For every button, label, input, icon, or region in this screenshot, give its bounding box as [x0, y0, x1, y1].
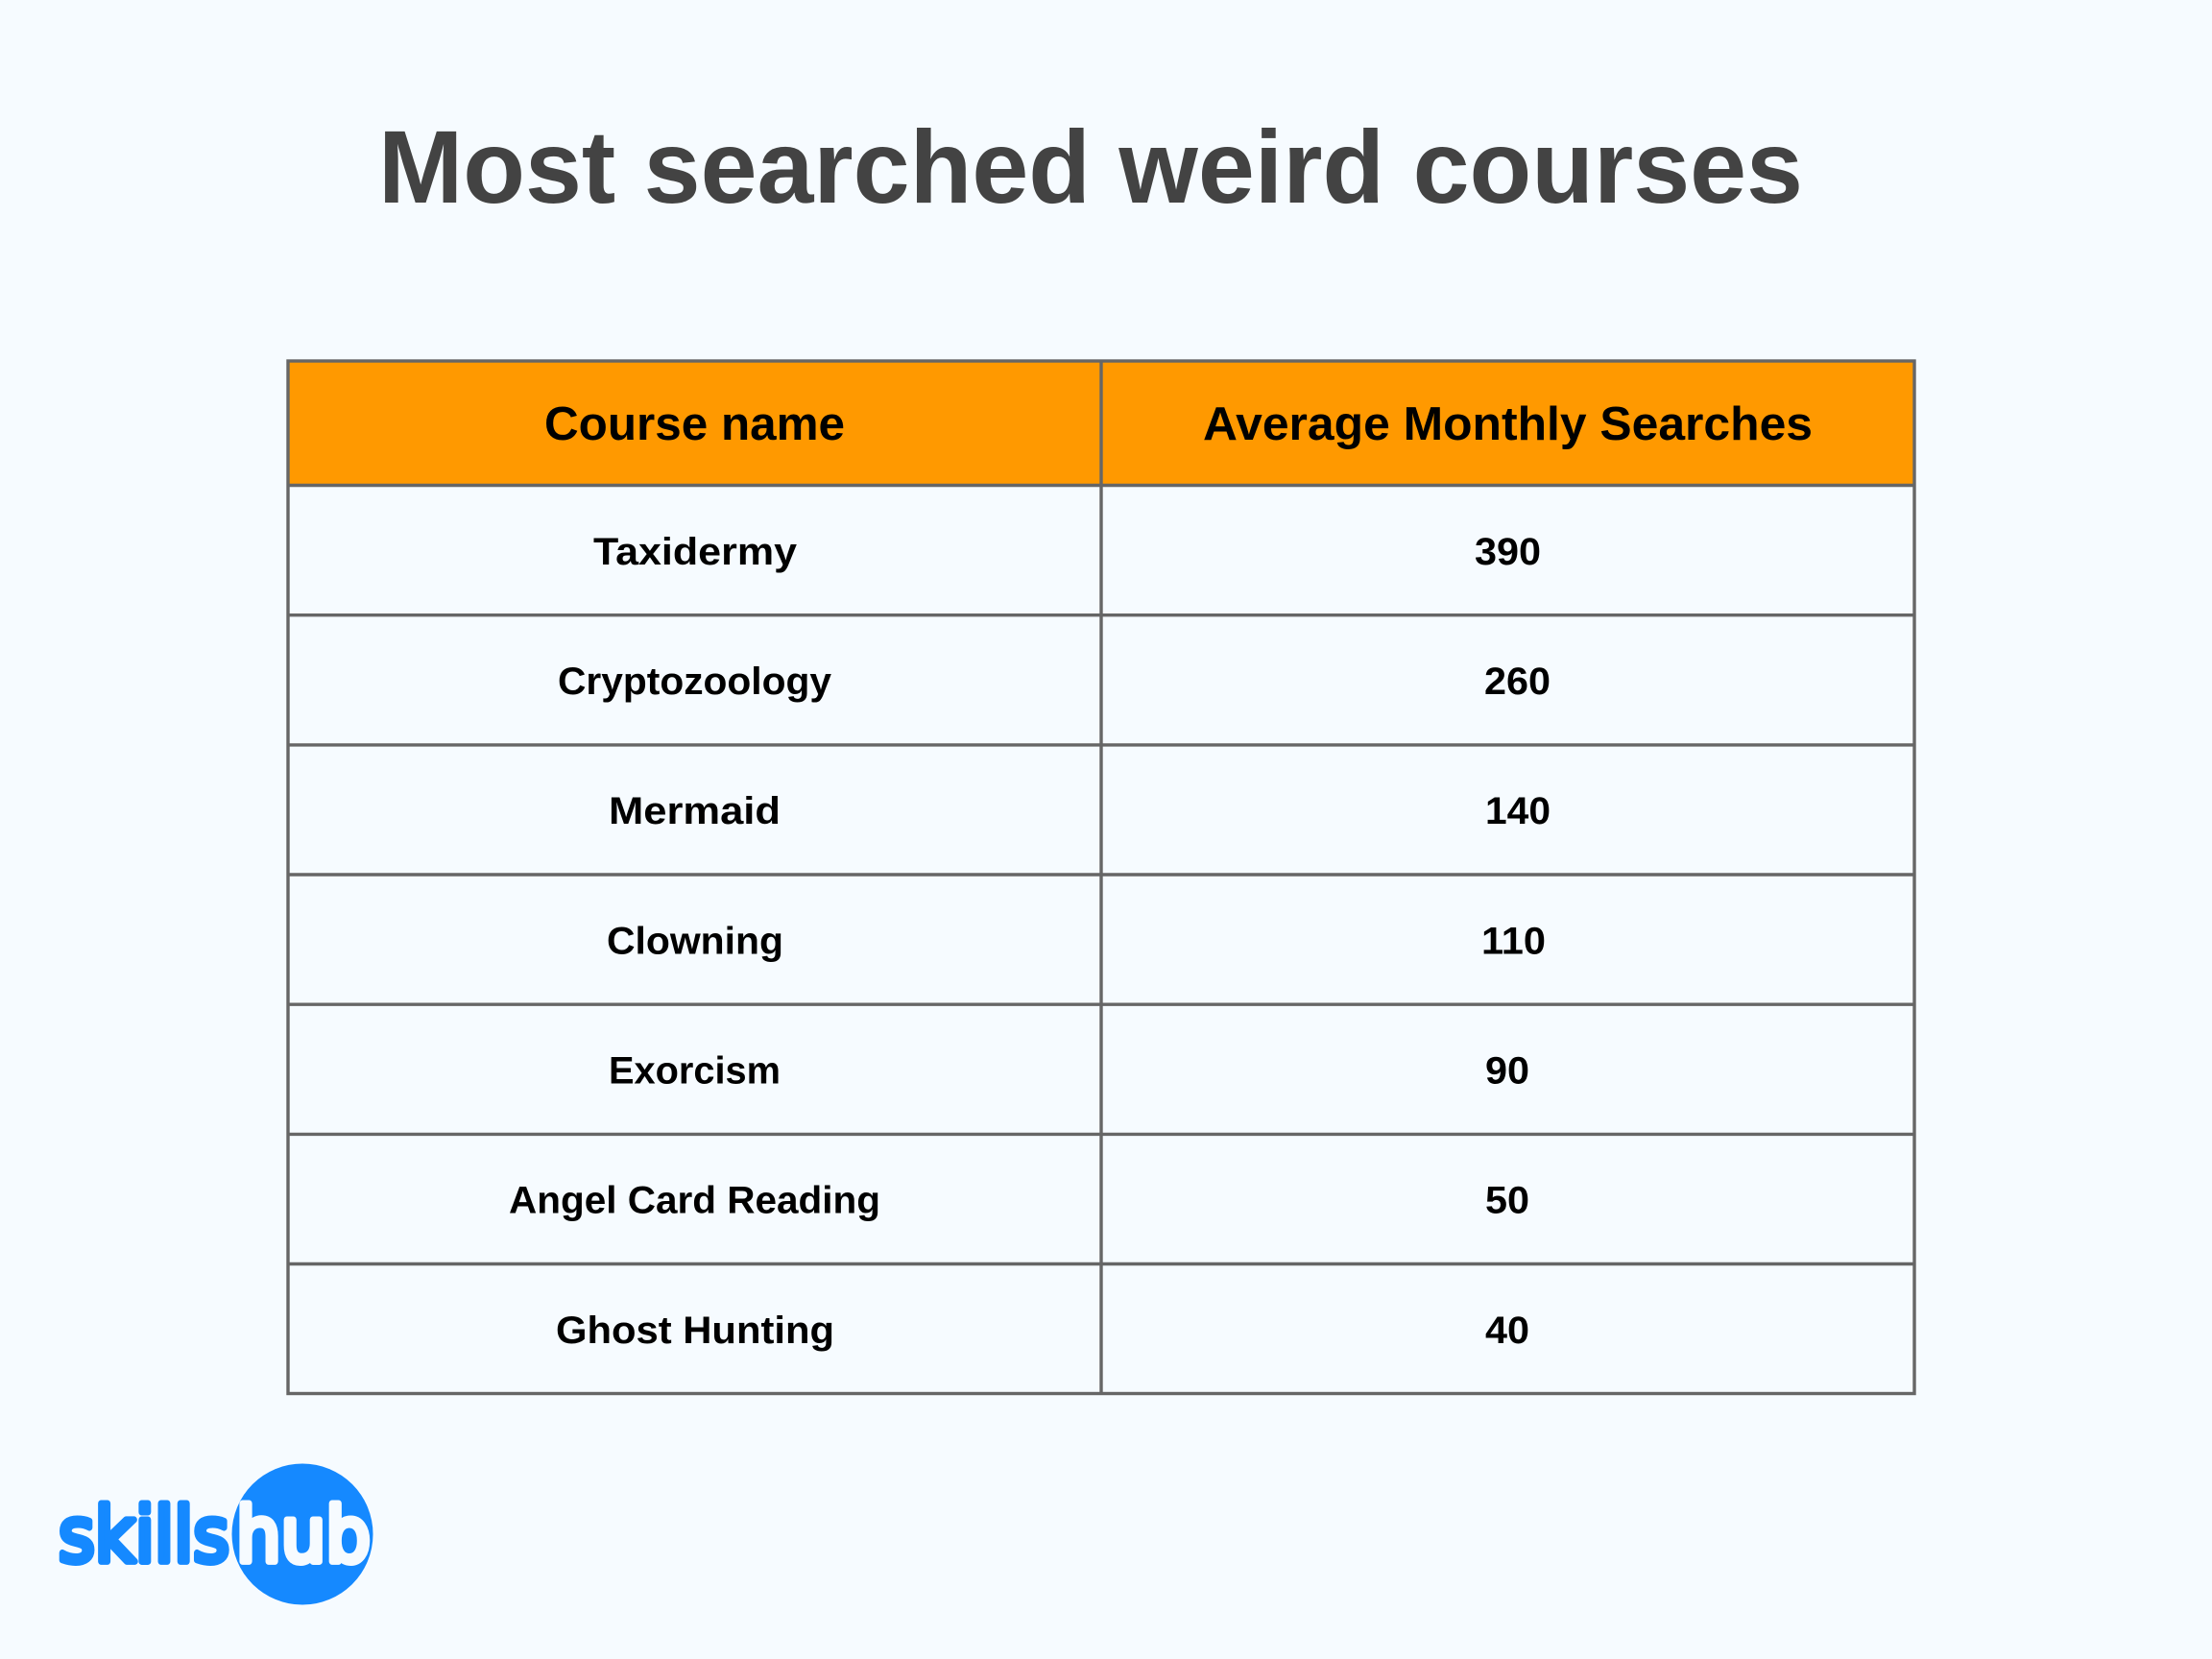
logo: skillshub: skills: [59, 1492, 229, 1580]
row: Taxidermy: 390: [1475, 531, 1541, 573]
table header background: [288, 361, 1914, 485]
row: Cryptozoology: 260: [1484, 661, 1551, 703]
row: Exorcism: [609, 1050, 1529, 1093]
row: Exorcism: 90: [1485, 1050, 1529, 1093]
row: Taxidermy: [593, 531, 1541, 573]
row: Ghost Hunting: [556, 1310, 1529, 1352]
header: average monthly searches: Average Monthly Searches: [1203, 398, 1813, 450]
row: Exorcism: Exorcism: [609, 1050, 781, 1093]
logo: skillshub: hub: [236, 1492, 371, 1580]
title: Most searched weird courses: [378, 108, 1803, 225]
row: Angel Card Reading: 50: [1485, 1179, 1529, 1221]
row: Clowning: 110: [1481, 920, 1546, 962]
row: Clowning: Clowning: [607, 920, 783, 962]
row: Mermaid: 140: [1485, 790, 1551, 832]
table grid: [288, 361, 1914, 1394]
row: Mermaid: Mermaid: [609, 790, 781, 832]
header: course name: Course name: [544, 398, 845, 450]
row: Clowning: [607, 920, 1546, 962]
row: Mermaid: [609, 790, 1551, 832]
row: Ghost Hunting: 40: [1485, 1310, 1529, 1352]
logo: skillshub: [59, 1463, 373, 1605]
row: Taxidermy: Taxidermy: [593, 531, 798, 573]
table: [288, 361, 1914, 1394]
row: Angel Card Reading: [509, 1179, 1529, 1221]
row: Cryptozoology: [558, 661, 1551, 703]
row: Cryptozoology: Cryptozoology: [558, 661, 832, 703]
row: Ghost Hunting: Ghost Hunting: [556, 1310, 834, 1352]
row: Angel Card Reading: Angel Card Reading: [509, 1179, 880, 1221]
